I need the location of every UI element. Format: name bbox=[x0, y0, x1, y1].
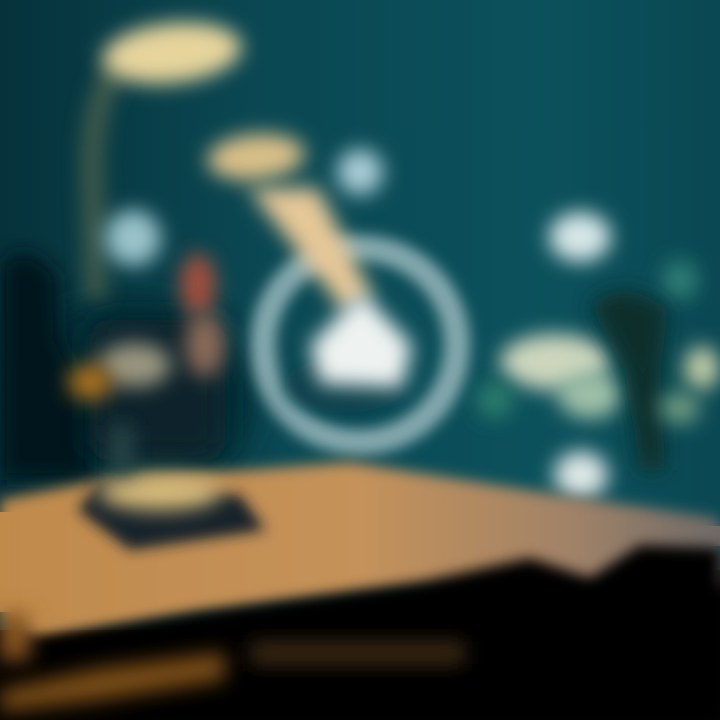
pale object bbox=[99, 343, 171, 387]
right plant cluster bbox=[477, 291, 720, 470]
dark silhouette: person bbox=[0, 252, 90, 480]
floating orb: left bbox=[105, 210, 161, 266]
glowing ring bbox=[263, 248, 457, 442]
book cover bbox=[98, 474, 222, 510]
floating orb: faint right bbox=[662, 260, 698, 300]
book shadow bbox=[78, 480, 265, 550]
ring inner shadow bbox=[285, 357, 405, 413]
left desk group bbox=[0, 252, 225, 480]
left table edge bbox=[0, 612, 30, 660]
book on desk bbox=[78, 474, 265, 550]
floating orb: lower right bbox=[554, 451, 608, 499]
floor base: solid black under the blurred foreground bbox=[0, 630, 720, 720]
wall shadow: lower left bbox=[5, 300, 255, 500]
floating orb: top centre bbox=[337, 149, 383, 195]
lower right leaf bbox=[660, 392, 700, 424]
lamp post stem bbox=[112, 425, 132, 475]
table top bbox=[0, 462, 720, 640]
red figure bbox=[180, 253, 216, 317]
dark plant bbox=[590, 291, 668, 470]
red figure lower bbox=[185, 313, 225, 377]
right table edge base bbox=[696, 526, 720, 546]
amber spot bbox=[68, 364, 112, 400]
left table edge base bbox=[0, 512, 24, 612]
far right leaf bbox=[684, 346, 720, 390]
faint left leaf bbox=[477, 382, 513, 418]
right floor base bbox=[640, 570, 720, 720]
desk objects shadow bbox=[90, 320, 225, 460]
dim glowing caption bbox=[250, 642, 465, 664]
pale leaves bbox=[500, 334, 610, 390]
floating orb: upper right bbox=[549, 212, 611, 262]
lamp shade: lower glow bbox=[205, 130, 307, 184]
light beam bbox=[248, 188, 372, 312]
green glow bbox=[558, 371, 622, 419]
glowing centre shape bbox=[310, 292, 412, 388]
table foreground shadow bbox=[0, 545, 720, 720]
lamp shade: upper glow bbox=[99, 16, 245, 90]
lamp arm bbox=[92, 65, 120, 300]
table front amber edge bbox=[0, 652, 225, 712]
